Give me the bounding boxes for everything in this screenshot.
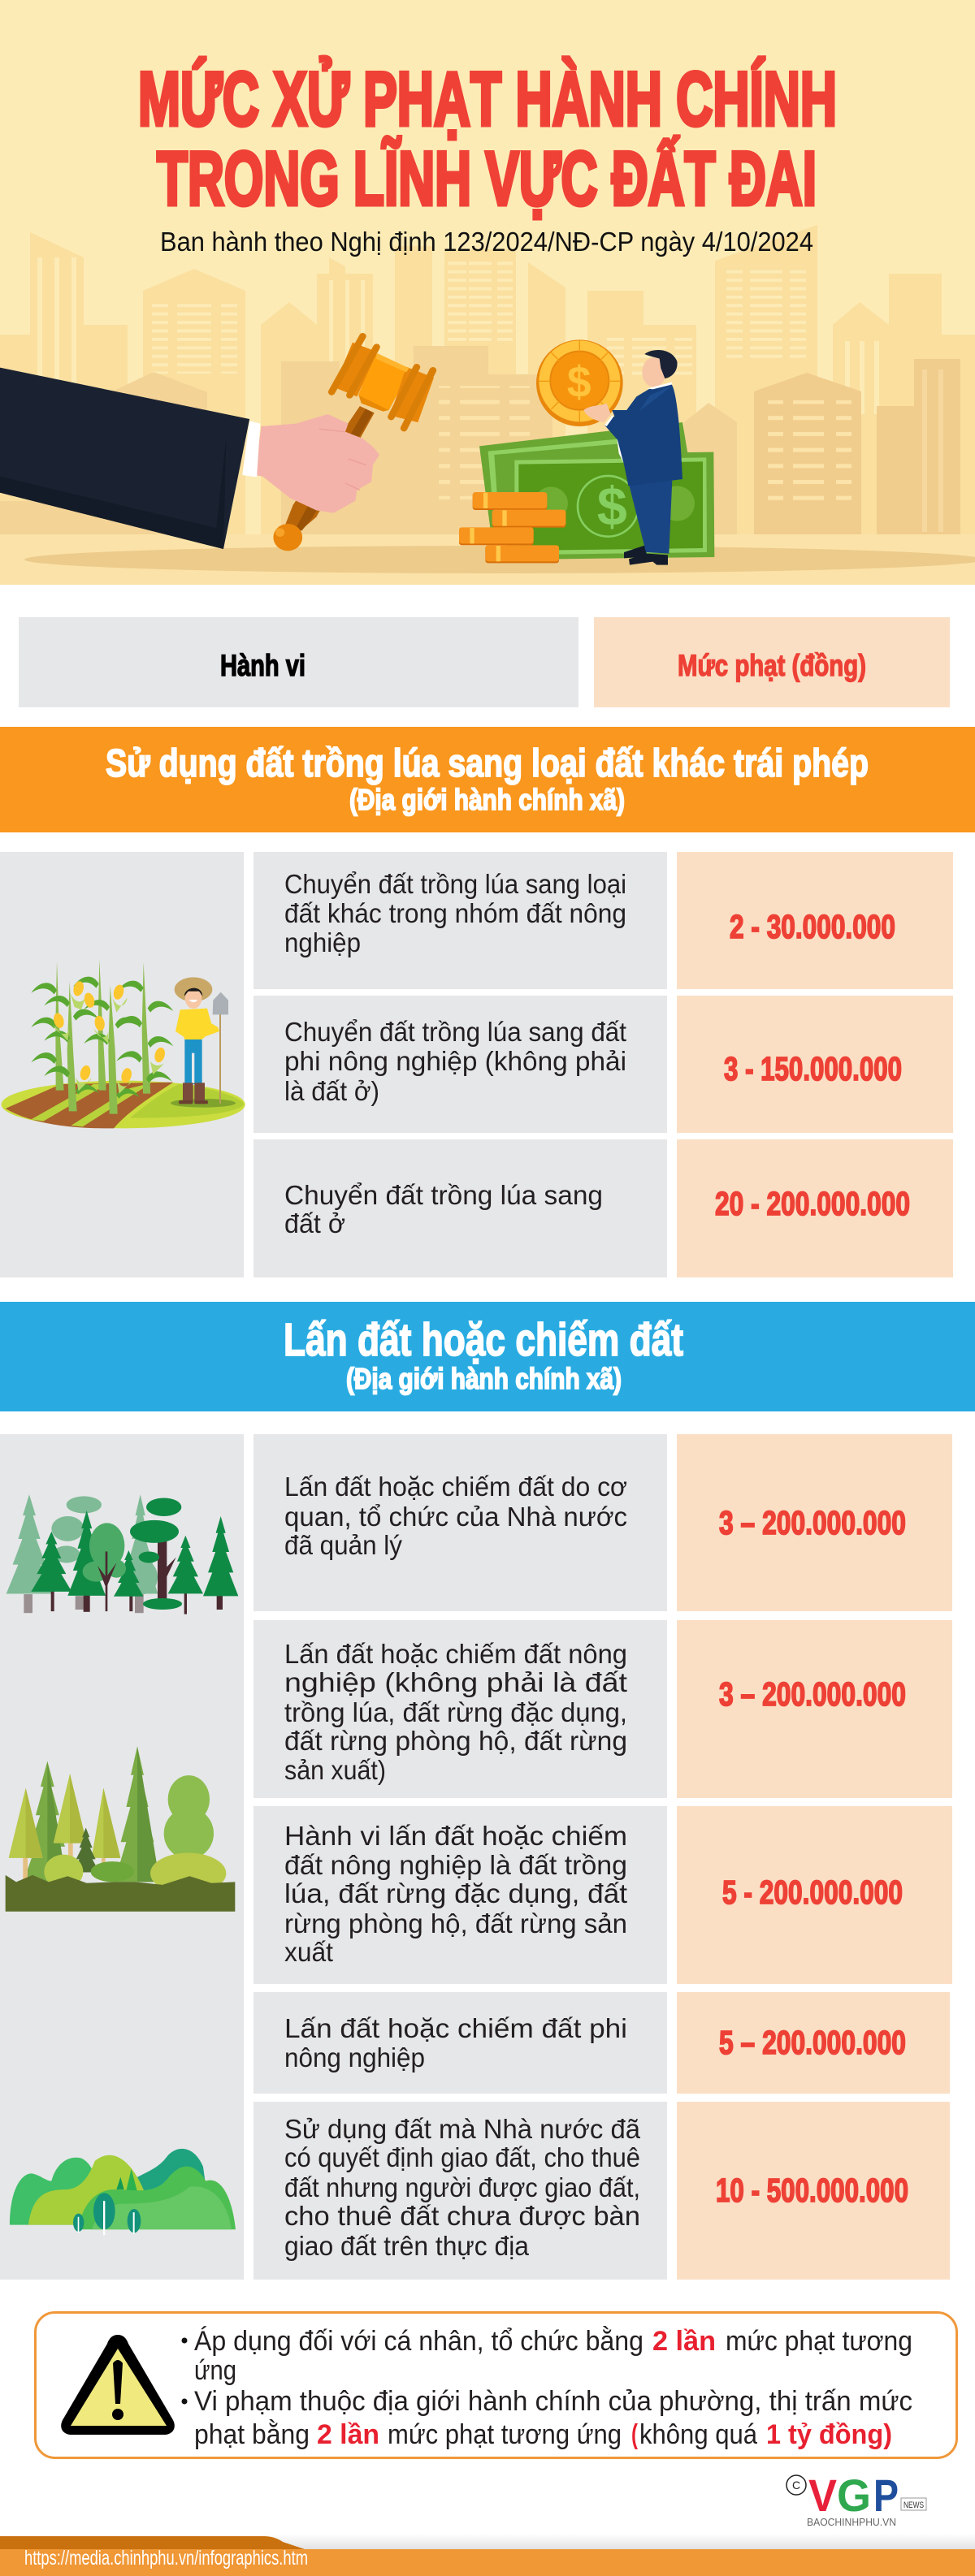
row: encroachment 5 text — [254, 2102, 667, 2280]
panel: forest illustrations — [0, 1434, 244, 2280]
row: rice land 3 text — [254, 1139, 667, 1277]
row: rice land 3 fine — [677, 1139, 953, 1277]
row: encroachment 4 text — [254, 1992, 667, 2094]
gold coin: $ — [567, 358, 592, 406]
icon: warning triangle — [61, 2335, 175, 2435]
callout: notes — [36, 2313, 957, 2457]
row: encroachment 3 fine: 5 - 200.000.000 — [722, 1874, 903, 1911]
row: encroachment 3 text: xuất — [284, 1937, 333, 1967]
row: rice land 1 fine — [677, 852, 953, 989]
row: encroachment 2 fine — [677, 1620, 952, 1798]
banknotes: $ — [597, 478, 627, 538]
row: encroachment 2 text — [254, 1620, 667, 1798]
note line 2: mức phạt tương ứng — [388, 2419, 622, 2450]
row: encroachment 5 text: có quyết định giao đất, cho thuê — [284, 2142, 640, 2172]
row: encroachment 4 fine — [677, 1992, 950, 2094]
row: encroachment 5 fine — [677, 2102, 950, 2280]
row: encroachment 2 fine: 3 – 200.000.000 — [719, 1675, 906, 1713]
city skyline — [0, 225, 975, 534]
icon: flat forest — [6, 1746, 235, 1912]
row: rice land 2 text — [254, 996, 667, 1133]
row: encroachment 5 text: giao đất trên thực địa — [284, 2231, 530, 2261]
row: encroachment 4 text: Lấn đất hoặc chiếm đất phi — [284, 2013, 627, 2043]
note line 2: Vi phạm thuộc địa giới hành chính của phường, thị trấn mức — [194, 2386, 912, 2417]
logo: VGP: P — [873, 2470, 899, 2521]
logo: VGP — [786, 2470, 926, 2528]
note line 2: ( — [631, 2419, 638, 2450]
logo: VGP: G — [837, 2470, 871, 2521]
row: encroachment 1 text: đã quản lý — [284, 1530, 402, 1560]
icon: hand holding gavel — [0, 336, 434, 551]
row: encroachment 1 fine — [677, 1434, 952, 1611]
note line 1: Áp dụng đối với cá nhân, tổ chức bằng — [194, 2326, 644, 2357]
note line 1: ứng — [194, 2355, 236, 2386]
logo: VGP: C — [792, 2479, 800, 2492]
icon: money and businessman — [459, 339, 714, 565]
section heading: encroachment: (Địa giới hành chính xã) — [346, 1362, 622, 1395]
gold coin — [536, 339, 623, 426]
subtitle: Ban hành theo Nghị định 123/2024/NĐ-CP ngày 4/10/2024 — [160, 227, 813, 257]
note line 1: mức phạt tương — [726, 2326, 912, 2357]
row: rice land 2 fine: 3 - 150.000.000 — [724, 1050, 902, 1087]
note line 2: phạt bằng — [194, 2419, 310, 2450]
businessman — [583, 350, 682, 565]
note line 1: 2 lần — [652, 2326, 716, 2357]
row: encroachment 2 text: sản xuất) — [284, 1755, 386, 1785]
row: encroachment 1 fine: 3 – 200.000.000 — [719, 1504, 906, 1541]
note line 2: không quá — [639, 2419, 757, 2450]
hero banner — [0, 0, 975, 585]
note line 2: 2 lần — [317, 2419, 379, 2450]
footer bar: https://media.chinhphu.vn/infographics.htm — [24, 2547, 308, 2570]
ground — [0, 534, 975, 585]
farmer — [175, 977, 228, 1104]
section heading: rice land — [0, 727, 975, 832]
title — [138, 56, 837, 221]
row: encroachment 2 text: trồng lúa, đất rừng đặc dụng, — [284, 1697, 627, 1727]
coin stack — [459, 492, 566, 563]
row: encroachment 2 text: nghiệp (không phải là đất — [284, 1667, 627, 1697]
table header: fine — [594, 617, 950, 707]
logo: VGP: NEWS — [904, 2500, 924, 2510]
panel: rice land illustration — [0, 852, 245, 1277]
row: rice land 2 fine — [677, 996, 953, 1133]
table header: behaviour: Hành vi — [220, 649, 306, 682]
icon: mixed tree line — [6, 1494, 238, 1614]
row: rice land 2 text: Chuyển đất trồng lúa sang đất — [284, 1017, 626, 1047]
note line 2 — [182, 2386, 912, 2450]
row: rice land 1 text — [254, 852, 667, 989]
row: encroachment 3 fine — [677, 1806, 952, 1984]
row: rice land 2 text: phi nông nghiệp (không phải — [284, 1046, 626, 1076]
row: encroachment 5 text: đất nhưng người được giao đất, — [284, 2172, 640, 2202]
row: rice land 1 fine: 2 - 30.000.000 — [730, 908, 895, 945]
table header: behaviour — [19, 617, 578, 707]
row: encroachment 3 text: Hành vi lấn đất hoặc chiếm — [284, 1821, 627, 1851]
row: encroachment 2 text: Lấn đất hoặc chiếm đất nông — [284, 1639, 627, 1669]
row: rice land 2 text: là đất ở) — [284, 1076, 379, 1106]
row: rice land 1 text: nghiệp — [284, 927, 361, 957]
row: encroachment 1 text: quan, tổ chức của Nhà nước — [284, 1502, 627, 1532]
row: encroachment 4 text: nông nghiệp — [284, 2042, 425, 2072]
icon: green hills — [10, 2149, 236, 2235]
footer bar — [0, 2534, 975, 2576]
logo: VGP: V — [808, 2470, 837, 2521]
note line 2: 1 tỷ đồng) — [766, 2419, 892, 2450]
logo: VGP: BAOCHINHPHU.VN — [807, 2516, 896, 2528]
row: encroachment 5 text: Sử dụng đất mà Nhà nước đã — [284, 2114, 641, 2144]
row: rice land 3 text: đất ở — [284, 1208, 345, 1238]
row: encroachment 3 text: đất nông nghiệp là đất trồng — [284, 1850, 627, 1880]
row: rice land 1 text: Chuyển đất trồng lúa sang loại — [284, 869, 626, 899]
row: rice land 3 fine: 20 - 200.000.000 — [715, 1185, 910, 1222]
row: encroachment 5 text: cho thuê đất chưa được bàn — [284, 2201, 640, 2231]
row: encroachment 5 fine: 10 - 500.000.000 — [716, 2172, 908, 2209]
row: encroachment 3 text: lúa, đất rừng đặc dụng, đất — [284, 1878, 627, 1908]
row: encroachment 1 text: Lấn đất hoặc chiếm đất do cơ — [284, 1472, 627, 1502]
row: encroachment 2 text: đất rừng phòng hộ, đất rừng — [284, 1726, 627, 1756]
section heading: encroachment: Lấn đất hoặc chiếm đất — [284, 1314, 683, 1366]
icon: corn field and farmer — [2, 960, 245, 1128]
row: encroachment 1 text — [254, 1434, 667, 1611]
row: rice land 1 text: đất khác trong nhóm đất nông — [284, 898, 626, 928]
section heading: rice land: (Địa giới hành chính xã) — [349, 783, 625, 816]
banknotes — [479, 422, 714, 559]
note line 1 — [182, 2326, 912, 2386]
section heading: encroachment — [0, 1302, 975, 1411]
table header: fine: Mức phạt (đồng) — [678, 649, 866, 682]
row: encroachment 4 fine: 5 – 200.000.000 — [719, 2024, 906, 2061]
row: rice land 3 text: Chuyển đất trồng lúa sang — [284, 1180, 603, 1210]
row: encroachment 3 text — [254, 1806, 667, 1984]
row: encroachment 3 text: rừng phòng hộ, đất rừng sản — [284, 1908, 627, 1938]
